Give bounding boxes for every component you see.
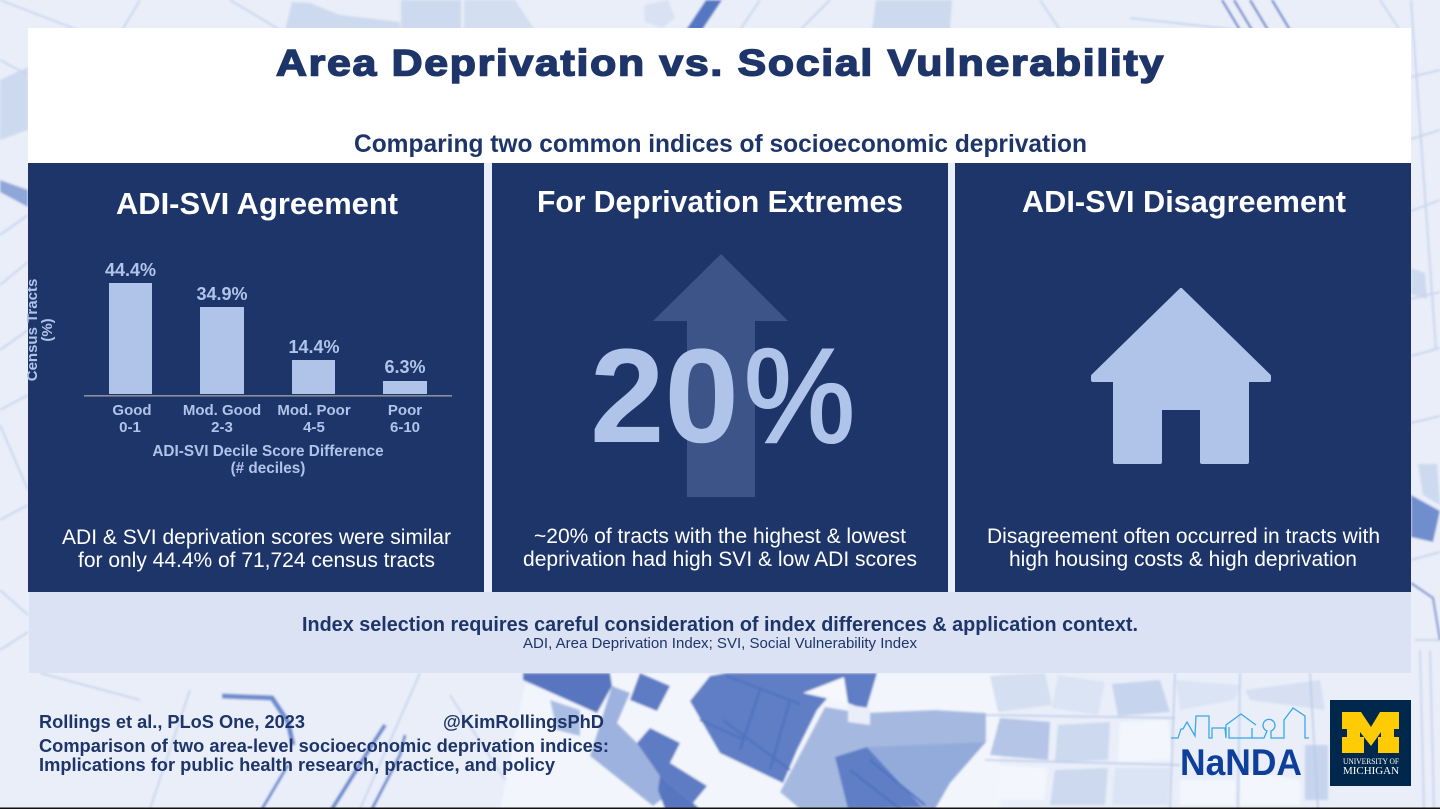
big number 20%: 20 bbox=[590, 322, 739, 471]
text: agreement finding bbox=[62, 526, 451, 572]
panel: ADI-SVI agreement bbox=[24, 163, 484, 592]
heading: ADI-SVI Agreement: ADI-SVI Agreement bbox=[116, 187, 398, 221]
citation footer: Comparison of two area-level socioeconomic deprivation indices: bbox=[39, 736, 609, 756]
text: extremes finding: ~20% of tracts with the highest & lowest bbox=[534, 525, 906, 548]
parcel blocks bottom bbox=[500, 673, 1000, 809]
big number 20% bbox=[590, 322, 855, 471]
text: agreement finding: for only 44.4% of 71,724 census tracts bbox=[78, 549, 435, 572]
citation footer: Rollings et al., PLoS One, 2023 bbox=[39, 712, 305, 732]
bar chart: ADI-SVI Decile Score Difference bbox=[152, 443, 384, 460]
logo: University of Michigan: UNIVERSITY OF bbox=[1343, 756, 1399, 766]
heading: For Deprivation Extremes: For Deprivation Extremes bbox=[537, 185, 903, 219]
text: extremes finding bbox=[523, 525, 917, 571]
text: agreement finding: ADI & SVI deprivation scores were similar bbox=[62, 526, 451, 549]
conclusion band bbox=[29, 592, 1411, 673]
text: extremes finding: deprivation had high SVI & low ADI scores bbox=[523, 548, 917, 571]
bar chart: 4-5 bbox=[303, 419, 325, 436]
bar chart: 2-3 bbox=[211, 419, 233, 436]
citation footer bbox=[39, 712, 609, 775]
icon: house bbox=[1093, 290, 1269, 462]
logo: NaNDA bbox=[1171, 708, 1309, 783]
bar chart: Good bbox=[112, 402, 152, 419]
bar chart: 6.3% bbox=[384, 357, 426, 377]
bar chart: Mod. Good bbox=[183, 402, 261, 419]
bar chart: Mod. Poor bbox=[277, 402, 351, 419]
conclusion text: Index selection requires careful consideration of index differences & application context. bbox=[302, 614, 1138, 636]
logo: NaNDA: NaNDA bbox=[1180, 742, 1302, 783]
bar chart bbox=[24, 260, 452, 477]
big number 20%: % bbox=[744, 322, 855, 471]
bar chart: (# deciles) bbox=[231, 460, 305, 477]
bar chart: 44.4% bbox=[105, 260, 156, 280]
title: Area Deprivation vs. Social Vulnerability bbox=[276, 42, 1165, 84]
abbreviations note: ADI, Area Deprivation Index; SVI, Social Vulnerability Index bbox=[523, 635, 917, 652]
bar chart: 6-10 bbox=[390, 419, 420, 436]
text: disagreement finding bbox=[987, 525, 1380, 571]
text: disagreement finding: high housing costs & high deprivation bbox=[1009, 548, 1357, 571]
white title panel bbox=[28, 28, 1411, 163]
bar chart: 14.4% bbox=[288, 337, 340, 357]
bar chart: Poor bbox=[388, 402, 422, 419]
panel: deprivation extremes bbox=[492, 163, 948, 592]
citation footer: Implications for public health research, practice, and policy bbox=[39, 755, 555, 775]
bar chart: (%) bbox=[39, 318, 56, 342]
bar chart: Census Tracts bbox=[24, 279, 41, 381]
logo: University of Michigan bbox=[1330, 700, 1411, 786]
text: disagreement finding: Disagreement often occurred in tracts with bbox=[987, 525, 1380, 548]
bar chart: 0-1 bbox=[119, 419, 141, 436]
icon: up arrow bbox=[653, 254, 788, 497]
bar chart: 34.9% bbox=[196, 284, 248, 304]
heading: ADI-SVI Disagreement: ADI-SVI Disagreement bbox=[1022, 185, 1346, 219]
subtitle: Comparing two common indices of socioeconomic deprivation bbox=[354, 130, 1087, 158]
panel: ADI-SVI disagreement bbox=[955, 163, 1411, 592]
logo: University of Michigan: MICHIGAN bbox=[1343, 766, 1399, 777]
citation footer: @KimRollingsPhD bbox=[443, 712, 604, 732]
